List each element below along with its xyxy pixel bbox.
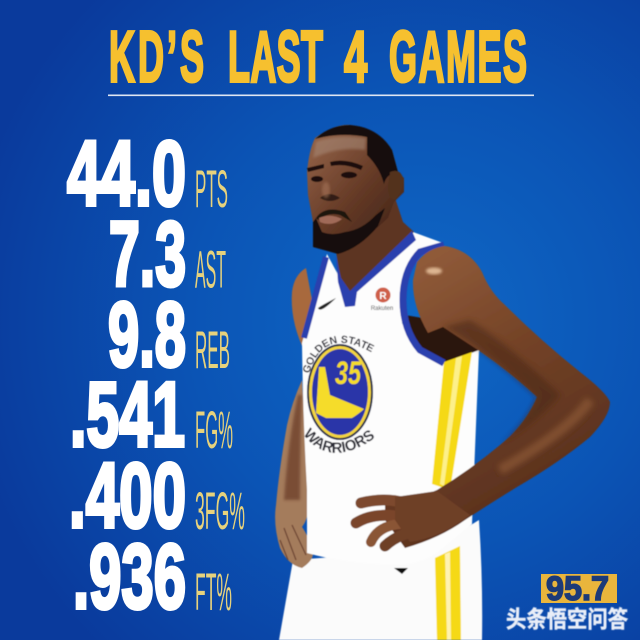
stat: three point percentage: .400 [69,445,186,547]
stat: assists: 7.3 [109,204,186,306]
text: AST [195,240,226,300]
title underline [108,94,534,96]
hair [315,125,398,184]
stats list [67,123,245,628]
text: FG% [195,401,233,460]
watermark: 头条悟空问答 [506,606,628,632]
title: 4 [344,18,367,97]
head [307,125,404,252]
stat: field goal percentage: .541 [70,364,185,466]
jersey trim [304,245,444,363]
moustache [316,210,352,222]
rakuten badge: Rakuten [371,306,393,312]
forehead highlight [313,137,366,158]
neck [335,195,414,292]
radio logo: 95.7 [546,570,609,608]
ear [388,171,403,200]
armpit shadow [405,315,480,366]
title: KD’S [109,17,204,98]
title: GAMES [389,17,527,98]
warriors logo: 35 [335,355,362,391]
shorts tag [394,568,408,574]
right hand back [395,491,470,542]
left forearm and hand [275,380,313,568]
nike swoosh [318,298,336,310]
shoulder highlight [426,268,442,274]
mouth [319,216,342,224]
left hand fingers [280,525,306,560]
jersey [302,232,479,565]
right arm [385,246,610,548]
arm inner shadow [443,320,560,445]
title: LAST [228,17,323,98]
shorts [279,520,482,640]
upper left arm [292,268,312,346]
warriors logo: GOLDEN STATE [302,335,375,374]
left forearm shading [284,395,302,500]
text: PTS [195,160,228,219]
rakuten badge: R [379,291,387,302]
forearm lower highlight [500,400,590,470]
stat: rebounds: 9.8 [108,284,186,386]
beard [313,208,385,254]
warriors logo: WARRIORS [304,427,374,454]
title [109,17,527,98]
stat: free throw percentage: .936 [73,526,186,628]
nose highlight [322,182,330,198]
rakuten badge [371,288,393,312]
jersey side stripe [432,352,472,490]
eyes and brows [307,161,363,201]
right hand fingers [356,500,425,546]
text: 3FG% [195,482,245,541]
warriors logo [302,335,375,454]
shorts stripes [435,546,461,640]
collar [336,231,416,307]
stat: points: 44.0 [67,123,186,225]
player illustration [274,124,611,640]
text: FT% [195,563,232,622]
text: REB [195,321,230,380]
